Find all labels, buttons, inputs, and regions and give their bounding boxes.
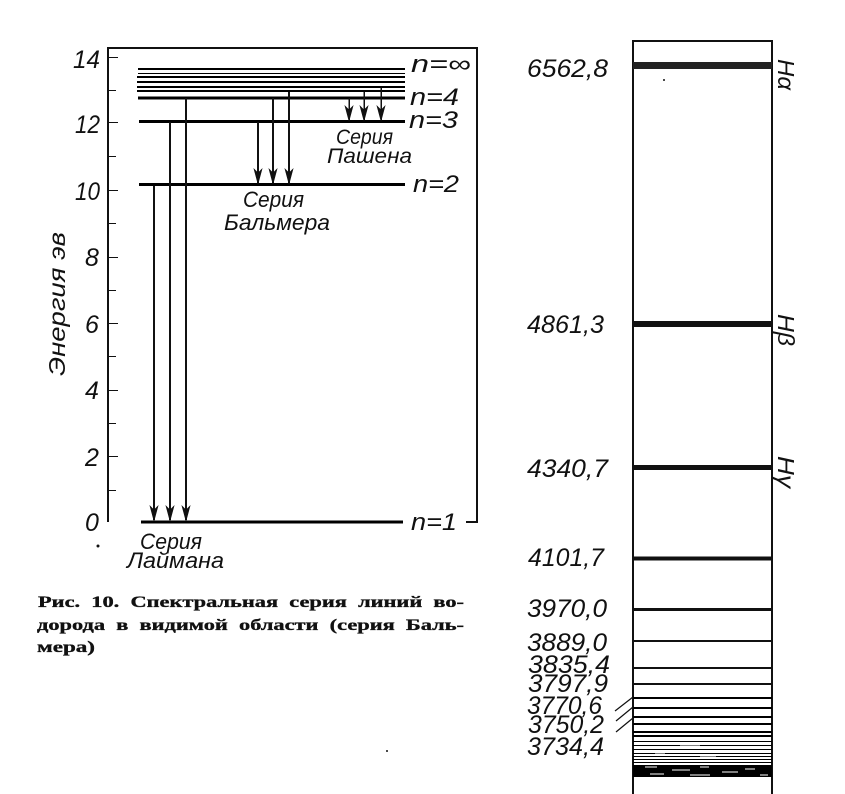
wavelength labels: 3734,4 [527, 733, 604, 761]
wavelength labels: 3797,9 [528, 670, 608, 698]
axis tick numbers: 8 [85, 244, 99, 272]
panel: hydrogen spectrum strip [527, 41, 799, 794]
axis tick numbers [73, 46, 100, 537]
axis tick numbers: 2 [84, 444, 99, 472]
series line labels: Hα [773, 59, 799, 91]
Paschen series arrows [345, 88, 385, 121]
level labels: n=∞ [411, 51, 471, 78]
wavelength labels: 3889,0 [527, 629, 607, 657]
energy levels [137, 69, 405, 522]
Paschen series label [327, 126, 412, 168]
series line labels: Hγ [773, 456, 799, 490]
wavelength labels: 4101,7 [528, 544, 605, 572]
strong spectral lines [633, 66, 772, 684]
axis tick numbers: 10 [75, 178, 100, 206]
Balmer series label: Серия [243, 187, 304, 212]
figure caption: дорода в видимой области (серия Баль- [37, 617, 464, 634]
wavelength labels: 4340,7 [527, 455, 609, 483]
wavelength labels: 6562,8 [527, 55, 608, 83]
wavelength labels [527, 55, 610, 761]
y-axis title: Энергия эв [44, 232, 70, 376]
wavelength labels: 3770,6 [527, 692, 602, 720]
axis tick numbers: 6 [85, 311, 99, 339]
stray print speck [96, 544, 100, 548]
Lyman series label [125, 529, 224, 573]
Balmer series label: Бальмера [224, 210, 330, 235]
axis tick numbers: 14 [73, 46, 100, 74]
series line labels: Hβ [773, 314, 799, 346]
level labels: n=1 [411, 509, 457, 536]
Balmer series label [224, 187, 330, 235]
panel: energy level diagram [44, 46, 477, 573]
level labels [409, 51, 471, 536]
print noise in the series limit band [645, 745, 768, 775]
converging series lines [633, 698, 772, 771]
axis tick numbers: 4 [85, 377, 99, 405]
figure caption: мера) [37, 639, 95, 656]
Paschen series label: Серия [336, 126, 393, 149]
Paschen series label: Пашена [327, 145, 412, 168]
series line labels [773, 59, 799, 490]
Lyman series arrows [150, 98, 190, 521]
level labels: n=3 [409, 107, 459, 134]
level labels: n=4 [410, 84, 459, 111]
figure caption [37, 594, 464, 656]
wavelength labels: 3750,2 [528, 711, 604, 739]
wavelength labels: 4861,3 [527, 311, 604, 339]
wavelength labels: 3970,0 [527, 595, 607, 623]
Balmer series arrows [254, 92, 293, 184]
chart frame and energy axis [107, 48, 477, 522]
Lyman series label: Лаймана [125, 548, 224, 573]
level labels: n=2 [413, 171, 459, 198]
axis tick numbers: 0 [85, 509, 99, 537]
figure caption: Рис. 10. Спектральная серия линий во- [38, 594, 464, 611]
stray print specks [386, 79, 665, 752]
wavelength labels: 3835,4 [528, 651, 610, 679]
axis tick numbers: 12 [75, 111, 100, 139]
strip frame [633, 41, 772, 794]
Lyman series label: Серия [140, 529, 202, 554]
leader lines [615, 697, 633, 732]
